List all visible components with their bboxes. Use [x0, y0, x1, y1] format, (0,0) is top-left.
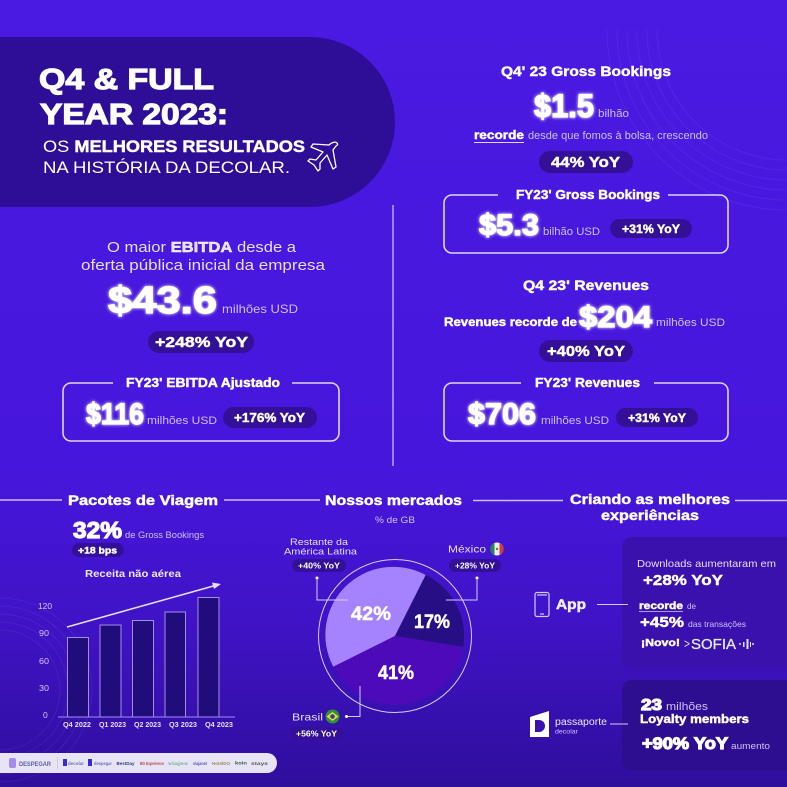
- value: $706: $706: [468, 398, 536, 431]
- logo: Passaporte Decolar: [530, 711, 607, 737]
- logo: Passaporte Decolar: decolar: [555, 730, 578, 736]
- panel: Loyalty: [530, 680, 787, 771]
- downloads stat: Downloads aumentaram em: [637, 558, 776, 570]
- value: $5.3: [479, 209, 600, 242]
- callout: Brasil: Brasil: [292, 712, 323, 724]
- brand logos: HotelDO: [212, 761, 230, 766]
- record note: desde que fomos à bolsa, crescendo: [528, 130, 708, 142]
- downloads stat: [637, 558, 776, 589]
- bar chart: 30: [39, 683, 49, 693]
- icon: Mexico flag: [490, 542, 504, 556]
- heading: Criando as melhores experiências: [570, 491, 730, 523]
- brand logos: BestDay: [116, 761, 135, 766]
- value: $5.3: $5.3: [479, 209, 539, 242]
- transactions stat: [639, 601, 746, 631]
- transactions stat: +45%: [640, 614, 684, 631]
- Sofia feature: >: [684, 636, 690, 651]
- Sofia feature: ¡Novo!: [641, 637, 680, 649]
- pill: 44% YoY: 44% YoY: [551, 154, 620, 171]
- title heading: YEAR 2023:: [40, 99, 228, 131]
- icon: phone: [535, 592, 549, 616]
- bar chart: Q2 2023: [134, 722, 161, 729]
- stat: 32% de Gross Bookings: [73, 517, 204, 543]
- panel: FY23 EBITDA: FY23' EBITDA Ajustado: [126, 375, 280, 390]
- stat: 23 milhões loyalty members: [640, 697, 749, 726]
- record note: recorde: [474, 128, 524, 142]
- panel: Q4 gross bookings: [474, 63, 708, 173]
- transactions stat: das transações: [688, 619, 746, 629]
- value: $204: [444, 301, 725, 334]
- stat: +90% YoY: aumento: [731, 741, 770, 751]
- record note: [474, 128, 708, 142]
- value: $706: milhões USD: [541, 415, 609, 427]
- Sofia feature: SOFIA: [691, 636, 736, 653]
- arrow: growth trend: [67, 582, 221, 627]
- brand logos: BD Experience: [140, 761, 164, 766]
- panel: Nossos mercados: Nossos mercados: [325, 492, 462, 508]
- bar chart: 60: [39, 656, 49, 666]
- value: $204: Revenues recorde de: [444, 315, 577, 329]
- title heading: [39, 64, 228, 131]
- value: $116: $116: [86, 398, 144, 431]
- brand logos: stays: [251, 761, 269, 766]
- value: $204: $204: [579, 301, 652, 334]
- panel: Q4 revenues: [444, 277, 725, 362]
- bar chart: Q4 2023: [205, 722, 233, 729]
- pill: +31% YoY: +31% YoY: [628, 411, 686, 425]
- logo: Despegar: [9, 758, 52, 768]
- EBITDA description: [81, 239, 326, 274]
- callout: México: +28% YoY: [455, 562, 496, 570]
- pill: +40% YoY: +40% YoY: [547, 343, 625, 360]
- callout: Restante da América Latina: América Latina: [284, 546, 358, 558]
- title subtitle line 2: NA HISTÓRIA DA DECOLAR.: [43, 158, 290, 177]
- pill: +18 bps: [72, 543, 124, 557]
- value: $5.3: bilhão USD: [543, 226, 600, 238]
- bar chart: 90: [39, 628, 49, 638]
- brand logos: viajes: [168, 761, 189, 766]
- logo bar: [0, 753, 277, 773]
- heading: Criando as melhores experiências: experiências: [601, 507, 699, 523]
- value: $43.6: $43.6: [108, 280, 217, 322]
- bar chart: Q1 2023: [99, 722, 126, 729]
- subtitle: % de GB: % de GB: [375, 515, 415, 525]
- brand logos: [63, 759, 269, 766]
- value: $706: [468, 398, 609, 431]
- pill: +31% YoY: [610, 219, 692, 238]
- panel: FY23 gross bookings: [444, 187, 728, 253]
- panel: Pacotes de Viagem: [38, 492, 235, 729]
- panel: App: [535, 537, 787, 669]
- transactions stat: de: [687, 601, 696, 611]
- icon: airplane: [308, 142, 338, 171]
- value: $116: milhões USD: [147, 415, 217, 427]
- bar chart: Q4 2022: [63, 722, 91, 729]
- brand logos: despegar: [94, 761, 112, 766]
- label: App: App: [556, 596, 586, 612]
- stat: 23 milhões loyalty members: 23: [641, 697, 662, 714]
- value: $1.5 bilhão: bilhão: [598, 108, 629, 120]
- pill: +31% YoY: +31% YoY: [622, 222, 680, 236]
- EBITDA description: oferta pública inicial da empresa: [81, 257, 326, 274]
- panel: Pacotes de Viagem: Pacotes de Viagem: [68, 492, 218, 508]
- bar chart: 0: [43, 710, 48, 720]
- panel: FY23 revenues: [444, 375, 728, 441]
- brand logos: viajanet: [193, 761, 207, 766]
- title heading: Q4 & FULL: [39, 64, 214, 96]
- panel: Q4 revenues: Q4 23' Revenues: [523, 277, 649, 293]
- logo: Passaporte Decolar: passaporte: [555, 717, 607, 728]
- pill: +40% YoY: [539, 340, 633, 362]
- pill: 44% YoY: [539, 151, 633, 173]
- chart title: Receita não aérea: [85, 568, 181, 580]
- value: $204: milhões USD: [656, 317, 725, 329]
- transactions stat: recorde: [639, 601, 684, 612]
- icon: Brazil flag: [326, 710, 340, 724]
- stat: +90% YoY: +90% YoY: [642, 734, 729, 753]
- panel: EBITDA: [81, 239, 326, 353]
- bar chart: Q3 2023: [169, 722, 197, 729]
- icon: Sofia waveform: [739, 639, 754, 649]
- callout: México: [446, 542, 504, 600]
- stat: +90% YoY: [642, 734, 770, 753]
- stat: 23 milhões loyalty members: milhões: [666, 701, 709, 713]
- value: $1.5 bilhão: [534, 88, 629, 124]
- callout: Restante da América Latina: +40% YoY: [298, 562, 341, 570]
- downloads stat: +28% YoY: [643, 572, 723, 589]
- panel: Q4 gross bookings: Q4' 23 Gross Bookings: [501, 63, 671, 79]
- callout: Brasil: [290, 686, 360, 740]
- callout: Restante da América Latina: [284, 537, 358, 600]
- pie chart: 41%: [378, 663, 414, 684]
- pie chart: 42%: [351, 604, 391, 625]
- pill: +248% YoY: [148, 331, 254, 353]
- panel: Nossos mercados: [284, 492, 504, 740]
- panel: FY23 gross bookings: FY23' Gross Bookings: [516, 187, 660, 202]
- pill: +31% YoY: [616, 408, 698, 427]
- heading: Criando as melhores experiências: Criando as melhores: [570, 491, 730, 507]
- callout: Brasil: +56% YoY: [296, 730, 338, 738]
- value: $116: [86, 398, 217, 431]
- stat: 23 milhões loyalty members: Loyalty members: [640, 712, 749, 726]
- callout: Restante da América Latina: Restante da: [290, 537, 349, 548]
- title subtitle: OS MELHORES RESULTADOS: [43, 137, 305, 156]
- brand logos: decolar: [68, 761, 84, 766]
- logo: Despegar: DESPEGAR: [19, 762, 52, 768]
- pill: +18 bps: +18 bps: [78, 546, 117, 556]
- bar chart: 120: [38, 601, 52, 611]
- value: $43.6: [108, 280, 298, 322]
- stat: 32% de Gross Bookings: de Gross Bookings: [125, 530, 204, 541]
- pill: +176% YoY: +176% YoY: [234, 411, 306, 425]
- title panel: [0, 37, 395, 207]
- value: $43.6: milhões USD: [222, 302, 298, 316]
- pill: +176% YoY: [223, 407, 317, 428]
- stat: 32% de Gross Bookings: 32%: [73, 517, 122, 543]
- pie chart: 17%: [414, 612, 450, 633]
- pie chart: [318, 560, 472, 712]
- bar chart: [38, 598, 235, 729]
- callout: México: México: [448, 544, 487, 556]
- panel: FY23 EBITDA: [63, 375, 339, 441]
- EBITDA description: O maior EBITDA desde a: [107, 239, 297, 256]
- pill: +248% YoY: +248% YoY: [155, 334, 248, 351]
- value: $1.5 bilhão: $1.5: [534, 88, 594, 124]
- brand logos: koin: [235, 760, 247, 766]
- panel: FY23 revenues: FY23' Revenues: [535, 375, 640, 390]
- Sofia feature: [641, 636, 754, 653]
